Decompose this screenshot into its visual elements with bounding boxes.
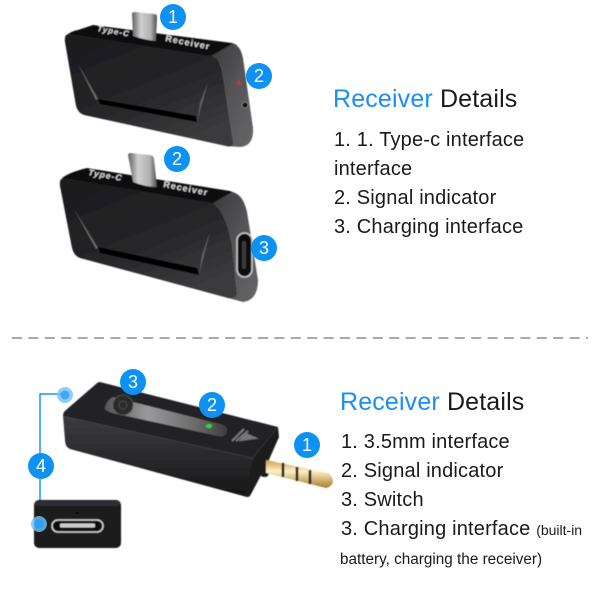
charging port hole	[242, 102, 248, 108]
badge 2: 2	[254, 66, 264, 86]
list: bottom details: 1. 3.5mm interface	[341, 431, 510, 453]
list: bottom details: 3. Switch	[341, 489, 424, 511]
body end	[245, 427, 279, 497]
badge 4: 4	[36, 456, 46, 476]
callout dot port	[31, 516, 47, 532]
body top	[63, 382, 278, 458]
3.5mm plug	[260, 453, 333, 488]
heading: top details: Receiver Details	[333, 85, 517, 113]
top strip with labels: Receiver	[165, 33, 211, 52]
device: top receiver	[65, 12, 253, 147]
badge 2: 2	[207, 395, 217, 415]
signal indicator light	[237, 81, 241, 85]
badge 4	[28, 453, 54, 479]
badge 1	[294, 432, 320, 458]
badge 3: 3	[259, 238, 269, 258]
device: middle receiver	[60, 153, 258, 302]
badge 3	[251, 235, 277, 261]
type-c plug	[128, 153, 157, 187]
callout line	[40, 394, 66, 524]
signal indicator light	[206, 424, 212, 428]
switch button	[113, 395, 133, 415]
list: bottom details: battery, charging the receiver)	[340, 551, 542, 568]
front face	[65, 34, 233, 146]
side panel	[213, 192, 258, 302]
list: top details: 2. Signal indicator	[334, 187, 497, 209]
body front	[63, 416, 253, 497]
top strip with labels	[68, 24, 237, 57]
top strip with labels: Type-C	[97, 24, 131, 39]
front face recess	[74, 209, 210, 275]
list: bottom details	[340, 431, 582, 568]
control plate	[105, 397, 227, 436]
list: bottom details: 2. Signal indicator	[341, 460, 504, 482]
badge 1: 1	[168, 7, 178, 27]
type-c plug	[132, 12, 157, 41]
list: top details: 3. Charging interface	[334, 216, 523, 238]
badge 3	[120, 369, 146, 395]
badge 1: 1	[302, 435, 312, 455]
list: top details: interface	[334, 158, 412, 180]
list: top details: 1. 1. Type-c interface	[334, 129, 524, 151]
direction mark	[232, 429, 255, 441]
badge 3: 3	[128, 372, 138, 392]
list: bottom details: 3. Charging interface (built-in	[341, 518, 582, 540]
heading: bottom details: Receiver Details	[340, 388, 524, 416]
top strip with labels: Receiver	[163, 179, 209, 198]
badge 2	[199, 392, 225, 418]
badge 2	[164, 146, 190, 172]
list: top details	[334, 129, 524, 238]
front face recess	[78, 64, 208, 122]
device: bottom receiver	[63, 382, 333, 497]
badge 2	[246, 63, 272, 89]
callout dot top	[57, 387, 73, 403]
charging port	[237, 233, 252, 277]
badge 1	[160, 4, 186, 30]
front face	[60, 178, 237, 298]
badge 2: 2	[172, 149, 182, 169]
top strip with labels: Type-C	[88, 167, 123, 183]
top strip with labels	[62, 167, 235, 204]
charging port inset	[34, 500, 121, 548]
side panel	[211, 44, 253, 147]
